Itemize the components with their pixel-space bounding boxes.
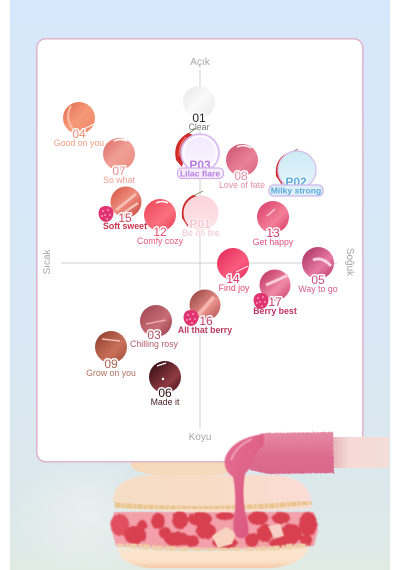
- swatch 16 All that berry: [178, 290, 232, 335]
- gloss drip: [225, 434, 264, 538]
- swatch 03 Chilling rosy: Chilling rosy: [130, 339, 179, 349]
- swatch 03 Chilling rosy: [130, 305, 179, 349]
- swatch 12 Comfy cozy: 12: [153, 225, 167, 239]
- swatch 04 Good on you: [54, 102, 104, 148]
- swatch 15 Soft sweet: 15: [118, 211, 132, 225]
- swatch 14 Find joy: [217, 248, 250, 293]
- swatch P02 Milky strong: Milky strong: [271, 186, 321, 196]
- swatch 16 All that berry: 16: [199, 314, 213, 328]
- swatch 06 Made it: Made it: [151, 397, 180, 407]
- swatch 07 So what: 07: [112, 164, 126, 178]
- swatch P03 Lilac flare: P03: [189, 158, 211, 172]
- swatch 05 Way to go: [298, 247, 338, 294]
- swatch P02 Milky strong: [269, 149, 323, 196]
- swatch 06 Made it: 06: [158, 386, 172, 400]
- axis label: light: Açık: [190, 57, 211, 68]
- swatch 14 Find joy: Find joy: [219, 283, 250, 293]
- swatch 05 Way to go: 05: [311, 273, 325, 287]
- swatch 17 Berry best: [253, 270, 297, 316]
- chart panel: [37, 39, 363, 462]
- swatch 08 Love of fate: [219, 144, 265, 190]
- swatch P01 Be on fire: Be on fire: [182, 228, 220, 238]
- swatch P03 Lilac flare: Lilac flare: [180, 168, 220, 178]
- swatch 08 Love of fate: 08: [234, 169, 248, 183]
- swatch 14 Find joy: 14: [226, 272, 240, 286]
- icon: strawberry 16: [184, 310, 198, 326]
- swatch 17 Berry best: Berry best: [253, 306, 297, 316]
- swatch 09 Grow on you: Grow on you: [86, 368, 136, 378]
- swatch P01 Be on fire: P01: [189, 217, 211, 231]
- gloss highlight: [231, 439, 252, 460]
- macaron bottom foot: [117, 544, 308, 550]
- swatch 04 Good on you: Good on you: [54, 138, 104, 148]
- applicator sponge: [246, 432, 334, 474]
- swatch 12 Comfy cozy: [137, 199, 184, 246]
- swatch 13 Get happy: Get happy: [253, 237, 294, 247]
- swatch 15 Soft sweet: [103, 186, 147, 231]
- icon: strawberry 17: [254, 293, 268, 309]
- swatch 09 Grow on you: [86, 331, 136, 378]
- macaron: top shell behind chart: [128, 455, 232, 476]
- swatch 04 Good on you: 04: [72, 127, 86, 141]
- background glow: [15, 455, 155, 570]
- swatch 01 Clear: Clear: [188, 122, 210, 132]
- swatch P01 Be on fire: [182, 191, 220, 238]
- swatch 13 Get happy: [253, 201, 294, 247]
- swatch 07 So what: So what: [103, 175, 135, 185]
- axis label: warm: Sıcak: [42, 248, 53, 275]
- swatch 07 So what: [103, 138, 135, 185]
- lip gloss applicator: [225, 432, 389, 538]
- swatch 03 Chilling rosy: 03: [147, 328, 161, 342]
- axis label: dark: Koyu: [189, 432, 211, 443]
- swatch P02 Milky strong: P02: [285, 175, 307, 189]
- swatch 12 Comfy cozy: Comfy cozy: [137, 236, 184, 246]
- macaron raspberry chunks: [111, 511, 317, 548]
- axis label: cool: Soğuk: [344, 248, 355, 277]
- chart axes: [61, 70, 337, 429]
- macaron top shell: [113, 475, 311, 512]
- swatch 15 Soft sweet: Soft sweet: [103, 221, 147, 231]
- swatch 06 Made it: [149, 361, 181, 407]
- macaron filling base: [111, 512, 318, 549]
- swatch 13 Get happy: 13: [266, 226, 280, 240]
- swatch 17 Berry best: 17: [268, 295, 282, 309]
- swatch 01 Clear: [183, 86, 215, 132]
- icon: strawberry 15: [98, 206, 114, 222]
- macaron top foot: [115, 502, 312, 508]
- swatch P03 Lilac flare: [175, 128, 224, 178]
- macaron pale chunk: [212, 527, 236, 548]
- macaron bottom shell: [117, 546, 307, 568]
- swatch 08 Love of fate: Love of fate: [219, 180, 265, 190]
- applicator handle: [332, 437, 389, 468]
- swatch 09 Grow on you: 09: [104, 357, 118, 371]
- swatch 05 Way to go: Way to go: [298, 284, 338, 294]
- swatch 01 Clear: 01: [192, 111, 206, 125]
- swatch 16 All that berry: All that berry: [178, 325, 232, 335]
- macaron: [111, 475, 318, 568]
